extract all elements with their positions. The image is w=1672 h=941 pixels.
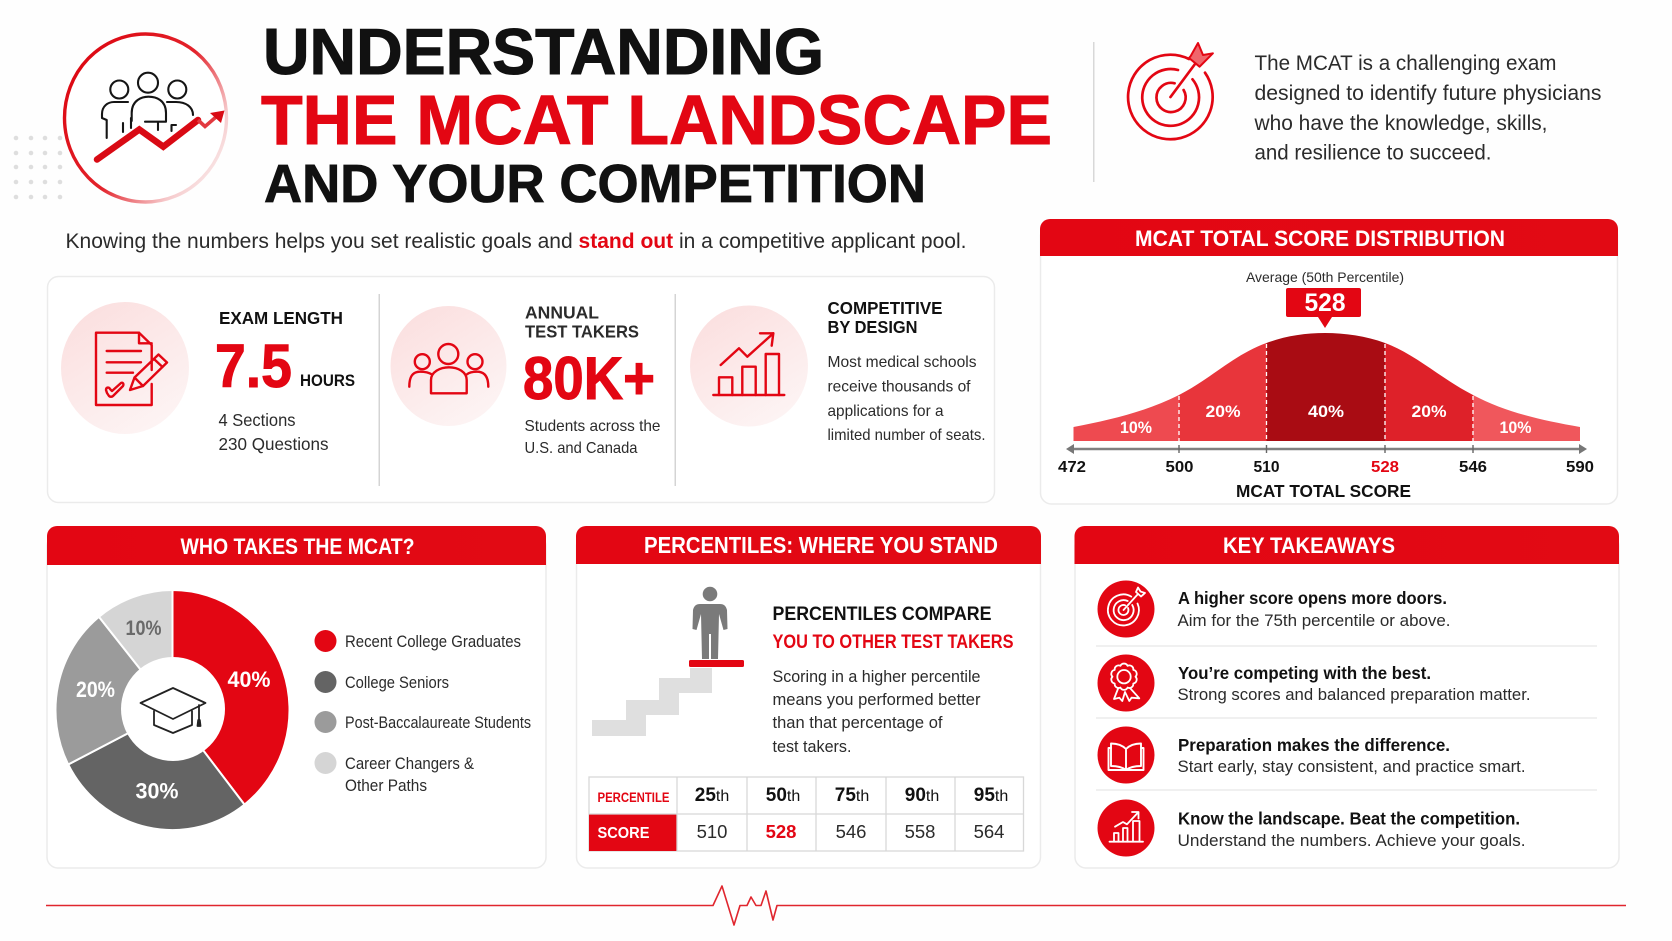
donut chart: 20% (76, 677, 115, 702)
icon: open book (1108, 744, 1144, 770)
panel header: WHO TAKES THE MCAT? (180, 534, 414, 559)
stat: exam length: 230 Questions (218, 434, 329, 454)
intro block with target icon (1093, 42, 1602, 182)
stat: competitive by design: applications for a (828, 403, 944, 420)
icon: person on stairs (592, 587, 744, 736)
donut chart: 10% (126, 617, 162, 640)
stat: competitive by design: COMPETITIVE (828, 298, 942, 318)
icon: award ribbon (1111, 664, 1139, 701)
legend: Career Changers & (345, 755, 474, 773)
bell curve chart (1058, 330, 1594, 501)
percentile table: 528 (766, 821, 796, 842)
takeaway 1 (1098, 580, 1450, 638)
intro text: and resilience to succeed. (1254, 142, 1492, 164)
bell curve chart: 546 (1459, 459, 1487, 476)
percentile table: 546 (836, 821, 866, 842)
stat: annual test takers: Students across the (524, 418, 661, 435)
panel header: MCAT TOTAL SCORE DISTRIBUTION (1135, 226, 1505, 251)
legend: College Seniors (345, 674, 449, 692)
bell curve chart: 20% (1412, 402, 1446, 421)
panel: percentiles (576, 526, 1041, 868)
takeaway 2: You’re competing with the best. (1178, 663, 1431, 683)
title: UNDERSTANDING (263, 15, 824, 88)
donut chart: 40% (228, 667, 270, 692)
bell curve chart: MCAT TOTAL SCORE (1236, 481, 1411, 501)
bell curve chart: 10% (1500, 418, 1532, 437)
icon: growth chart (1110, 812, 1143, 842)
takeaway 1: A higher score opens more doors. (1178, 588, 1447, 608)
heartbeat line (46, 886, 1626, 925)
stat: competitive by design: BY DESIGN (828, 317, 918, 337)
percentile table: 50th (766, 785, 800, 806)
takeaway 3: Preparation makes the difference. (1178, 735, 1450, 755)
title: THE MCAT LANDSCAPE (261, 81, 1052, 159)
average callout (1246, 269, 1404, 328)
legend: Recent College Graduates (345, 633, 521, 651)
percentile explanation: YOU TO OTHER TEST TAKERS (772, 632, 1014, 653)
takeaway 3: Start early, stay consistent, and practice smart. (1178, 758, 1526, 776)
header logo: people and rising arrow (14, 34, 227, 202)
title (261, 15, 1052, 214)
stat: annual test takers (390, 302, 661, 457)
stat: annual test takers: ANNUAL (525, 302, 599, 322)
icon: document and pencil (96, 333, 167, 405)
takeaway 4: Understand the numbers. Achieve your goals. (1178, 832, 1526, 850)
panel: who takes the MCAT (47, 526, 546, 868)
takeaway 1: Aim for the 75th percentile or above. (1178, 612, 1450, 630)
percentile table: 75th (835, 785, 869, 806)
panel header (576, 526, 1041, 564)
stat: annual test takers: U.S. and Canada (524, 440, 638, 457)
legend (314, 630, 531, 795)
bell curve chart: 528 (1371, 459, 1399, 476)
title: AND YOUR COMPETITION (264, 154, 926, 214)
bell curve chart: 10% (1120, 418, 1152, 437)
percentile table (589, 777, 1024, 851)
stat: exam length: 4 Sections (218, 410, 296, 430)
panel header (47, 526, 546, 565)
panel: key takeaways (1074, 526, 1619, 868)
intro text: The MCAT is a challenging exam (1254, 52, 1556, 75)
percentile explanation: test takers. (772, 738, 852, 756)
takeaway 2 (1098, 654, 1530, 712)
average callout: Average (50th Percentile) (1246, 269, 1404, 285)
icon: target with arrow (1128, 43, 1213, 139)
icon: target (1108, 588, 1145, 625)
stat: competitive by design: receive thousands of (828, 378, 971, 396)
panel header (1074, 526, 1619, 564)
donut chart: 30% (136, 778, 178, 804)
percentile table: 558 (905, 821, 935, 842)
intro text: designed to identify future physicians (1254, 82, 1602, 105)
bell curve chart: 40% (1308, 402, 1344, 421)
stat: competitive by design (690, 298, 986, 444)
bell curve chart: 510 (1254, 459, 1280, 476)
panel: score distribution (1040, 219, 1618, 504)
stat: exam length: EXAM LENGTH (219, 308, 343, 328)
takeaway 3 (1098, 726, 1526, 784)
stat: competitive by design: Most medical schools (828, 354, 976, 371)
stat: annual test takers: 80K+ (523, 345, 655, 412)
icon: group of people (409, 344, 488, 393)
percentile explanation (772, 604, 1014, 756)
bell curve chart: 472 (1058, 459, 1086, 476)
legend: Post-Baccalaureate Students (345, 714, 531, 732)
donut chart (55, 590, 290, 830)
percentile explanation: than that percentage of (772, 714, 943, 732)
icon: graduation cap (140, 688, 206, 733)
stat: exam length: HOURS (300, 372, 355, 390)
panel: key stats (48, 276, 994, 502)
stat: competitive by design: limited number of seats. (828, 427, 986, 444)
takeaway 2: Strong scores and balanced preparation matter. (1178, 686, 1530, 704)
takeaway 4 (1098, 800, 1526, 856)
percentile explanation: means you performed better (772, 691, 981, 709)
intro text: who have the knowledge, skills, (1254, 112, 1548, 135)
percentile table: 510 (697, 821, 727, 842)
percentile explanation: PERCENTILES COMPARE (772, 604, 992, 625)
percentile table: 90th (905, 785, 939, 806)
percentile table: SCORE (598, 825, 650, 842)
icon: bar chart with arrow (713, 333, 784, 395)
panel header (1040, 219, 1618, 256)
panel header: PERCENTILES: WHERE YOU STAND (644, 532, 998, 558)
percentile table: PERCENTILE (598, 790, 670, 805)
stat: annual test takers: TEST TAKERS (525, 322, 639, 342)
intro text (1254, 52, 1602, 164)
dot pattern (14, 136, 62, 199)
panel header: KEY TAKEAWAYS (1223, 533, 1395, 558)
stat: exam length: 7.5 (215, 332, 292, 400)
bell curve chart: 20% (1206, 402, 1240, 421)
percentile table: 95th (974, 785, 1008, 806)
legend: Other Paths (345, 777, 427, 795)
percentile explanation: Scoring in a higher percentile (772, 668, 980, 686)
stat: exam length (61, 302, 355, 454)
bell curve chart: 500 (1166, 459, 1194, 476)
average callout: 528 (1304, 289, 1346, 317)
axis (1066, 444, 1587, 454)
takeaway 4: Know the landscape. Beat the competition. (1178, 808, 1520, 828)
tagline: Knowing the numbers helps you set realistic goals and stand out in a competitive applicant pool. (66, 230, 966, 253)
bell curve chart: 590 (1566, 459, 1594, 476)
percentile table: 25th (695, 785, 729, 806)
percentile table: 564 (974, 821, 1004, 842)
